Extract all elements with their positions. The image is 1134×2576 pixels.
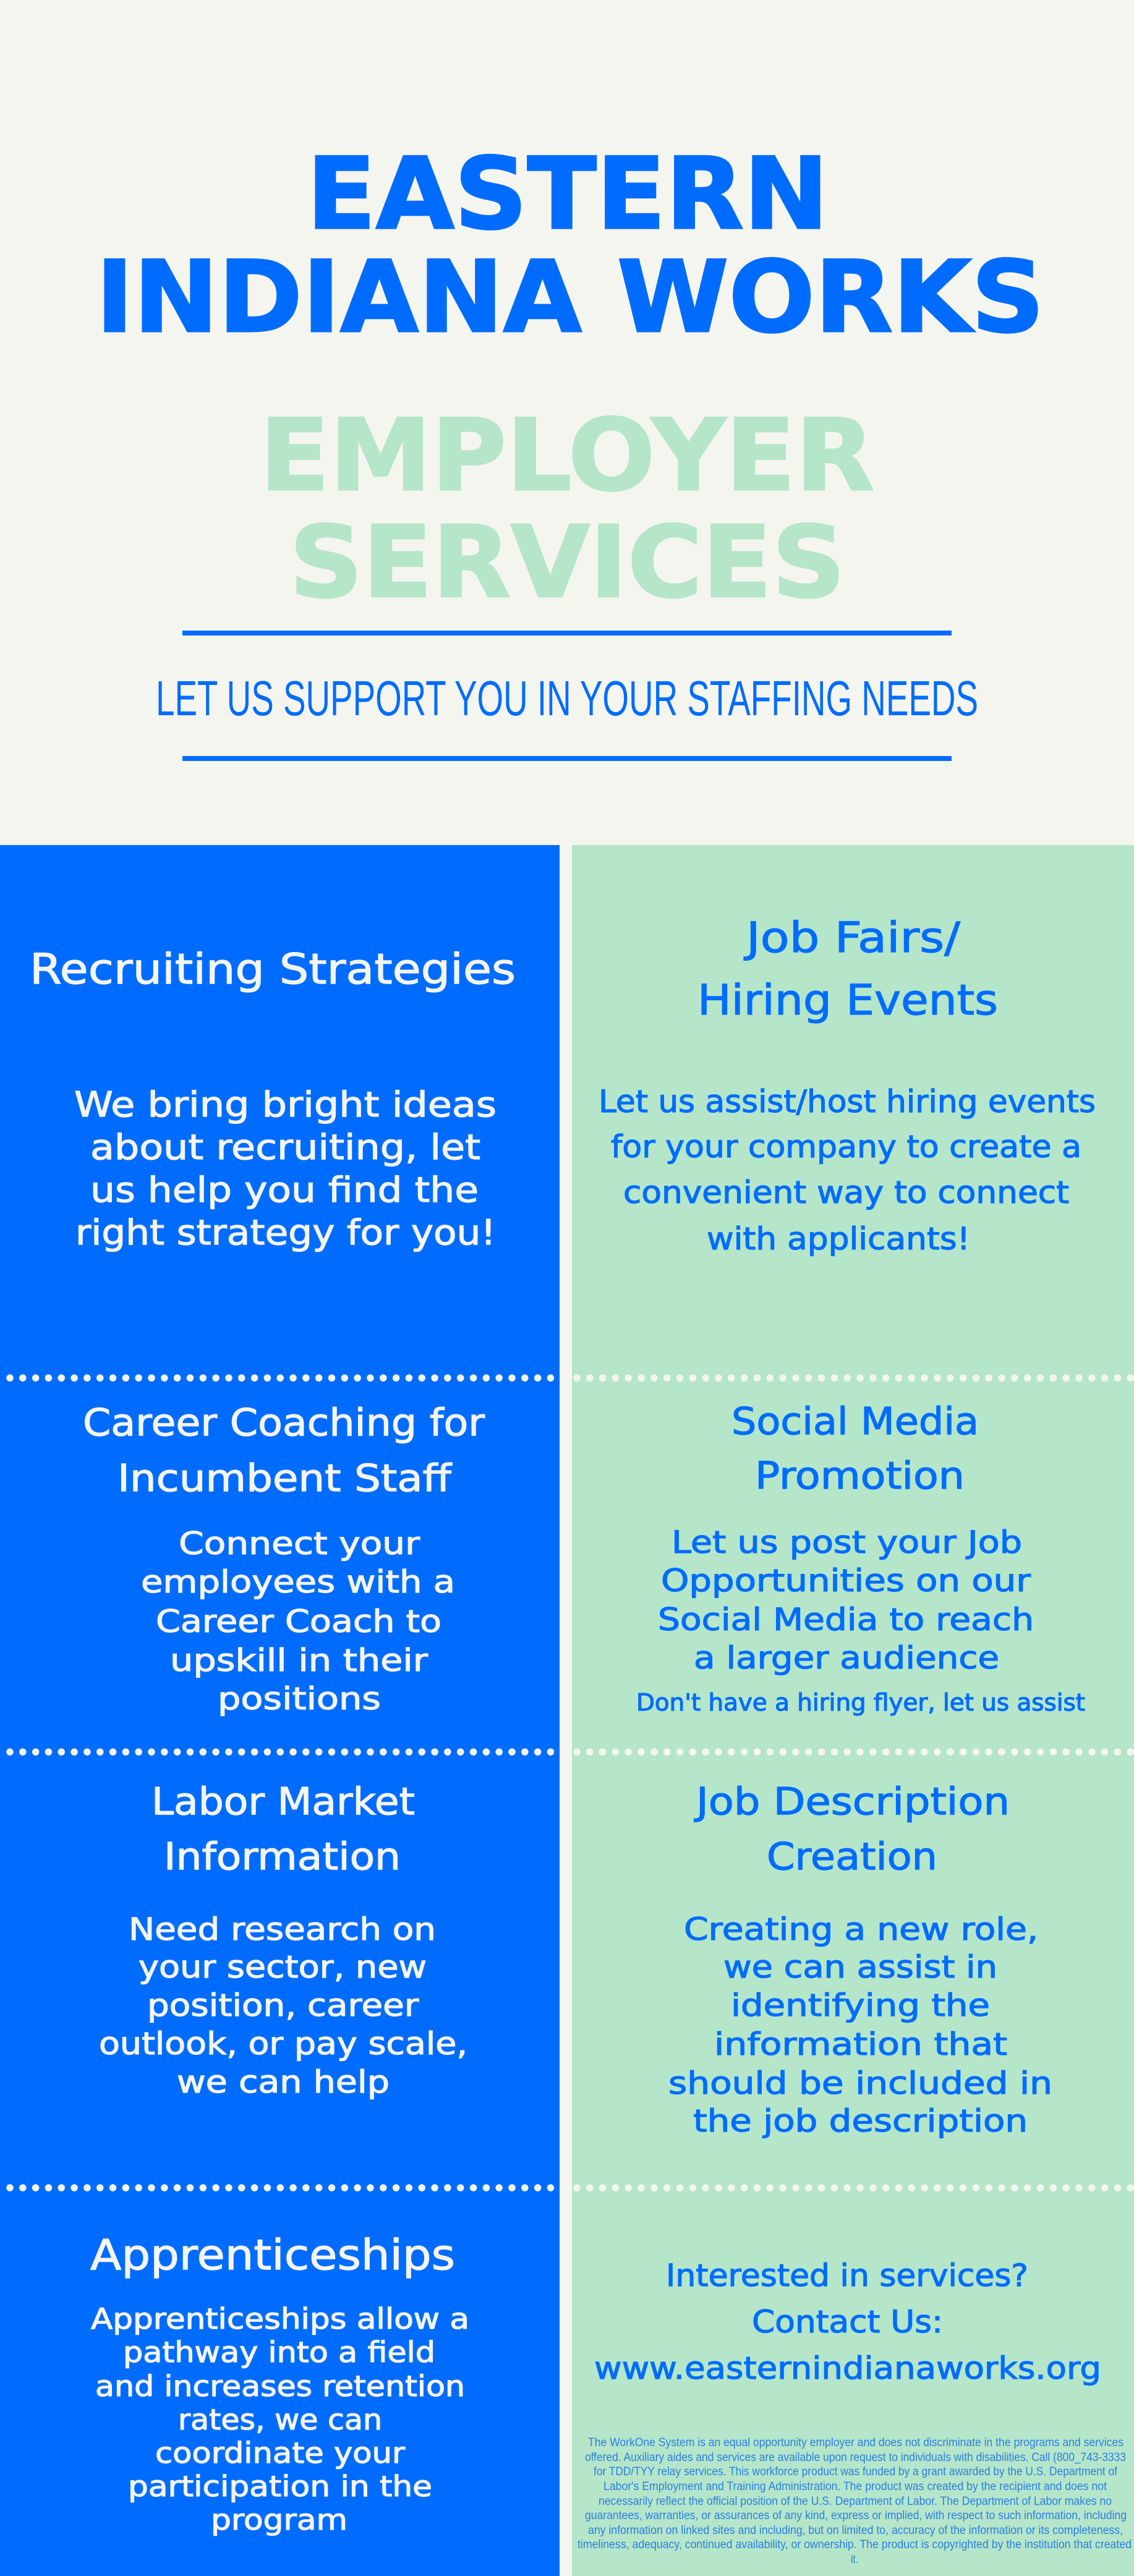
text: career coaching description: Connect your xyxy=(179,1526,420,1562)
heading: Labor Market Information: Labor Market xyxy=(151,1780,415,1824)
text: job fairs description: with applicants! xyxy=(707,1221,970,1257)
panel: header xyxy=(0,0,1134,845)
text: recruiting description: about recruiting, let xyxy=(90,1128,480,1168)
heading: Job Description Creation: Creation xyxy=(767,1835,937,1879)
heading: Recruiting Strategies: Recruiting Strategies xyxy=(30,945,516,994)
text: career coaching description: Career Coach to xyxy=(156,1604,441,1639)
heading: Career Coaching for Incumbent Staff: Incumbent Staff xyxy=(117,1456,453,1500)
text: job fairs description xyxy=(599,1084,1096,1257)
text: legal disclaimer xyxy=(578,2436,1132,2566)
text: labor market description xyxy=(99,1911,467,2100)
text: job description details: should be included in xyxy=(668,2065,1052,2101)
text: social media description: Social Media to reach xyxy=(658,1602,1034,1638)
text: job description details xyxy=(668,1911,1052,2139)
text: career coaching description: employees with a xyxy=(141,1564,455,1600)
text: job fairs description: Let us assist/host hiring events xyxy=(599,1084,1096,1120)
text: apprenticeships description xyxy=(91,2302,469,2536)
heading: Career Coaching for Incumbent Staff: Career Coaching for xyxy=(83,1401,485,1445)
heading: Labor Market Information: Information xyxy=(164,1835,401,1879)
title: Eastern Indiana Works xyxy=(96,136,1044,355)
panel: Job Description Creation xyxy=(668,1780,1052,2139)
text: labor market description: Need research on xyxy=(129,1911,436,1947)
heading: Social Media Promotion: Promotion xyxy=(755,1454,965,1498)
text: contact call to action: Contact Us: xyxy=(752,2304,943,2340)
panel: Recruiting Strategies xyxy=(30,945,516,1253)
heading: Job Fairs / Hiring Events xyxy=(697,914,998,1025)
text: labor market description: outlook, or pay scale, xyxy=(99,2026,467,2062)
panel: right green column xyxy=(572,845,1134,2576)
text: apprenticeships description: program xyxy=(211,2503,347,2536)
text: career coaching description xyxy=(141,1526,455,1717)
text: social media description xyxy=(658,1524,1034,1676)
heading: Job Description Creation: Job Description xyxy=(694,1780,1010,1824)
text: job description details: Creating a new role, xyxy=(684,1911,1038,1947)
text: job description details: identifying the xyxy=(731,1987,990,2023)
heading: Labor Market Information xyxy=(151,1780,415,1879)
panel: Career Coaching xyxy=(83,1401,485,1717)
panel: Apprenticeships xyxy=(90,2231,469,2536)
text: hiring flyer note: Don't have a hiring flyer, let us assist xyxy=(636,1689,1085,1716)
text: labor market description: your sector, new xyxy=(139,1949,427,1985)
title: Eastern Indiana Works: EASTERN xyxy=(307,136,829,252)
panel: left blue column xyxy=(0,845,560,2576)
heading: Social Media Promotion: Social Media xyxy=(731,1400,979,1443)
heading: Social Media Promotion xyxy=(731,1400,979,1498)
text: apprenticeships description: coordinate your xyxy=(155,2436,405,2470)
heading: Job Fairs / Hiring Events: Hiring Events xyxy=(697,976,998,1025)
heading: Employer Services: EMPLOYER xyxy=(260,397,874,513)
panel: Labor Market Information xyxy=(99,1780,467,2100)
text: social media description: a larger audience xyxy=(694,1640,999,1676)
text: labor market description: we can help xyxy=(177,2064,390,2100)
panel: Job Fairs / Hiring Events xyxy=(599,914,1096,1257)
panel: contact xyxy=(594,2258,1101,2386)
heading: Job Description Creation xyxy=(694,1780,1010,1879)
text: career coaching description: positions xyxy=(218,1681,381,1717)
text: recruiting description: right strategy for you! xyxy=(75,1213,496,1253)
text: apprenticeships description: participation in the xyxy=(128,2470,432,2503)
link text: website: www.easternindianaworks.org xyxy=(594,2350,1101,2386)
text: apprenticeships description: rates, we can xyxy=(178,2403,382,2436)
title: Eastern Indiana Works: INDIANA WORKS xyxy=(96,239,1044,355)
heading: Employer Services: SERVICES xyxy=(289,504,845,620)
text: contact call to action xyxy=(666,2258,1028,2340)
text: job description details: information that xyxy=(714,2026,1007,2062)
text: social media description: Let us post your Job xyxy=(671,1524,1022,1560)
text: job fairs description: for your company to create a xyxy=(611,1129,1081,1165)
text: labor market description: position, career xyxy=(147,1987,419,2023)
text: contact call to action: Interested in services? xyxy=(666,2258,1028,2293)
text: job description details: we can assist in xyxy=(723,1949,997,1985)
text: job description details: the job description xyxy=(693,2103,1028,2139)
text: recruiting description: us help you find the xyxy=(90,1170,479,1210)
text: job fairs description: convenient way to connect xyxy=(623,1175,1069,1210)
text: recruiting description: We bring bright ideas xyxy=(74,1085,497,1125)
text: recruiting description xyxy=(74,1085,497,1253)
text: apprenticeships description: pathway into a field xyxy=(123,2336,435,2369)
text: career coaching description: upskill in their xyxy=(170,1643,428,1678)
text: apprenticeships description: and increases retention xyxy=(95,2370,465,2403)
text: social media description: Opportunities on our xyxy=(661,1563,1031,1599)
heading: Employer Services xyxy=(260,397,874,620)
panel: Social Media Promotion xyxy=(636,1400,1085,1716)
heading: Job Fairs / Hiring Events: Job Fairs/ xyxy=(743,914,960,963)
heading: Apprenticeships: Apprenticeships xyxy=(90,2231,455,2280)
heading: Career Coaching for Incumbent Staff xyxy=(83,1401,485,1500)
text: legal disclaimer: it. xyxy=(851,2553,858,2566)
text: apprenticeships description: Apprenticeships allow a xyxy=(91,2302,469,2336)
